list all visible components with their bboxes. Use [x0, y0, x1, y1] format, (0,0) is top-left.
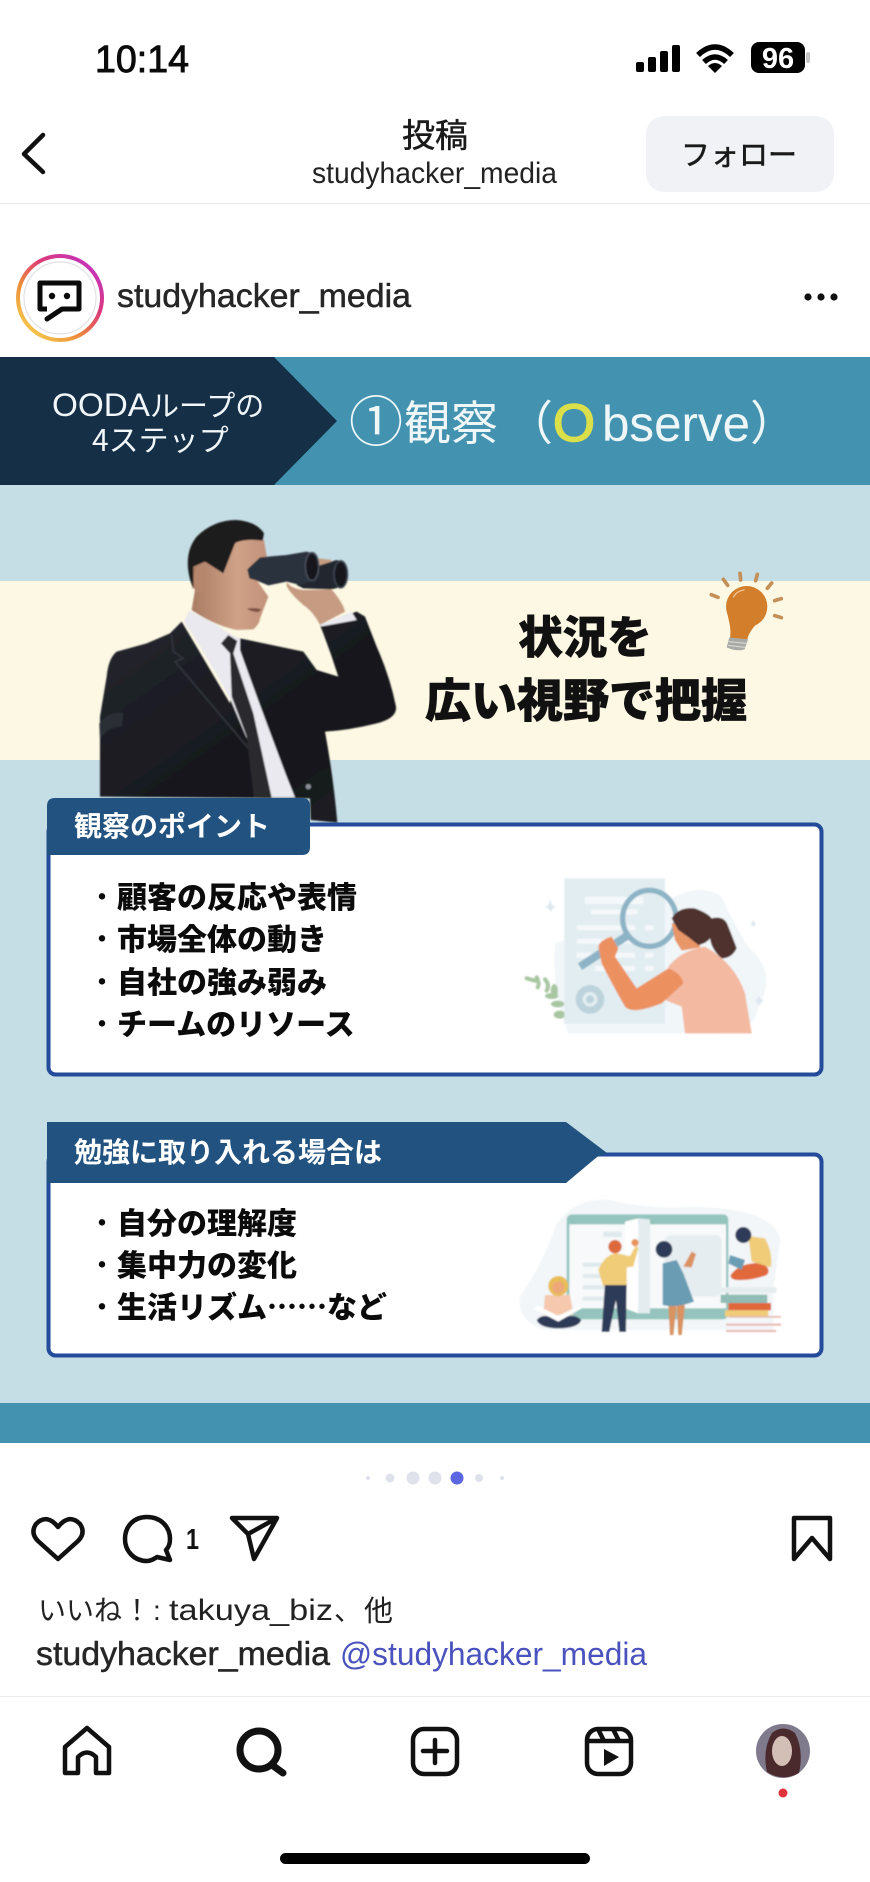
likes line: ！: [123, 1589, 151, 1629]
hand: [287, 582, 345, 625]
banner title: ）: [750, 385, 797, 454]
clock: 10:14: [95, 39, 189, 81]
binoculars: [297, 560, 347, 589]
photo: man with binoculars: [99, 520, 396, 823]
slide header banner: [0, 357, 870, 485]
jacket: [100, 612, 396, 823]
banner title: bserve: [602, 396, 750, 452]
banner title: O: [553, 394, 595, 453]
books stack: [721, 1287, 781, 1332]
list: ・集中力の変化: [87, 1241, 297, 1285]
illustration: people studying: [520, 1200, 781, 1335]
panel: applying to study: [47, 1122, 822, 1356]
panel: observation points: [47, 798, 822, 1074]
caption username and mention: @studyhacker_media: [340, 1636, 647, 1672]
banner title: 観察: [404, 385, 498, 454]
banner title: ①: [349, 378, 403, 457]
icon: share: [232, 1518, 277, 1559]
shirt cuff: [319, 612, 357, 626]
step tag arrow: 4ステップ: [92, 416, 229, 460]
action bar: [33, 1517, 830, 1561]
list: ・自社の強み弱み: [87, 958, 327, 1002]
cream headline band: [0, 581, 870, 760]
avatar: [18, 256, 102, 340]
icon: back chevron: [24, 135, 43, 172]
icon: reels: [587, 1729, 631, 1774]
icon: light bulb: [711, 573, 781, 650]
likes line: 、: [334, 1589, 362, 1629]
likes line: :: [153, 1595, 161, 1626]
list: ・市場全体の動き: [87, 915, 327, 959]
icon: wifi: [698, 47, 732, 73]
list: [87, 1199, 387, 1327]
illustration: woman with magnifier: [527, 878, 766, 1033]
header subtitle: studyhacker_media: [312, 157, 558, 190]
likes line: いいね: [38, 1589, 122, 1629]
woman in blue dress: [656, 1241, 696, 1335]
banner title: （: [506, 385, 553, 454]
comment count: 1: [186, 1524, 199, 1556]
likes line: takuya_biz: [169, 1594, 333, 1627]
tab heading: [47, 798, 310, 855]
arrow heading: 勉強に取り入れる場合は: [74, 1131, 382, 1171]
bottom tab bar: [65, 1724, 810, 1798]
icon: comment: [125, 1517, 170, 1561]
list: ・顧客の反応や表情: [87, 873, 357, 917]
slide footer strip: [0, 1403, 870, 1443]
list: [87, 873, 357, 1044]
list: ・自分の理解度: [87, 1199, 297, 1243]
tab heading: 観察のポイント: [74, 805, 270, 845]
step tag arrow: ループの: [150, 383, 264, 425]
tie: [221, 635, 272, 797]
card: [48, 1154, 822, 1356]
icon: home: [65, 1728, 109, 1773]
caption: [36, 1588, 647, 1672]
header title: 投稿: [402, 109, 468, 157]
follow button: [646, 116, 834, 192]
notification dot: [778, 1788, 788, 1798]
man in yellow sweater: [598, 1239, 639, 1332]
list: ・チームのリソース: [87, 1000, 355, 1044]
home indicator: [280, 1853, 590, 1864]
icon: search: [240, 1731, 283, 1773]
post author row: [18, 256, 838, 340]
card: [48, 824, 822, 1074]
slide background: [0, 485, 870, 1405]
status bar: [95, 39, 810, 81]
icon: battery 96: 96: [762, 43, 794, 75]
icon: heart: [33, 1519, 83, 1559]
likes line: 他: [364, 1588, 393, 1630]
arrow heading: [47, 1122, 607, 1183]
username: studyhacker_media: [117, 277, 412, 314]
head: [190, 540, 268, 630]
likes line: [38, 1588, 393, 1630]
step tag arrow: [0, 357, 337, 485]
carousel dots: [366, 1472, 504, 1484]
caption username and mention: [36, 1635, 647, 1672]
icon: create: [413, 1729, 457, 1774]
icon: signal bars: [636, 45, 680, 72]
shirt: [184, 611, 295, 797]
step tag arrow: OODA: [52, 387, 151, 423]
profile avatar: [756, 1724, 810, 1778]
button: [306, 784, 311, 789]
list: ・生活リズム……など: [87, 1283, 387, 1327]
icon: battery 96: [751, 42, 810, 75]
headline: 状況を: [518, 601, 652, 666]
banner title: [349, 378, 797, 457]
reader seated on the floor: [533, 1276, 582, 1328]
person on books: [728, 1227, 771, 1280]
icon: more dots: [804, 293, 838, 301]
follow button: フォロー: [681, 132, 797, 174]
headline: 広い視野で把握: [425, 665, 747, 731]
icon: bookmark: [794, 1518, 830, 1559]
hair: [188, 520, 264, 589]
caption username and mention: studyhacker_media: [36, 1635, 331, 1672]
headline: [425, 601, 747, 731]
navigation header: [24, 109, 834, 192]
